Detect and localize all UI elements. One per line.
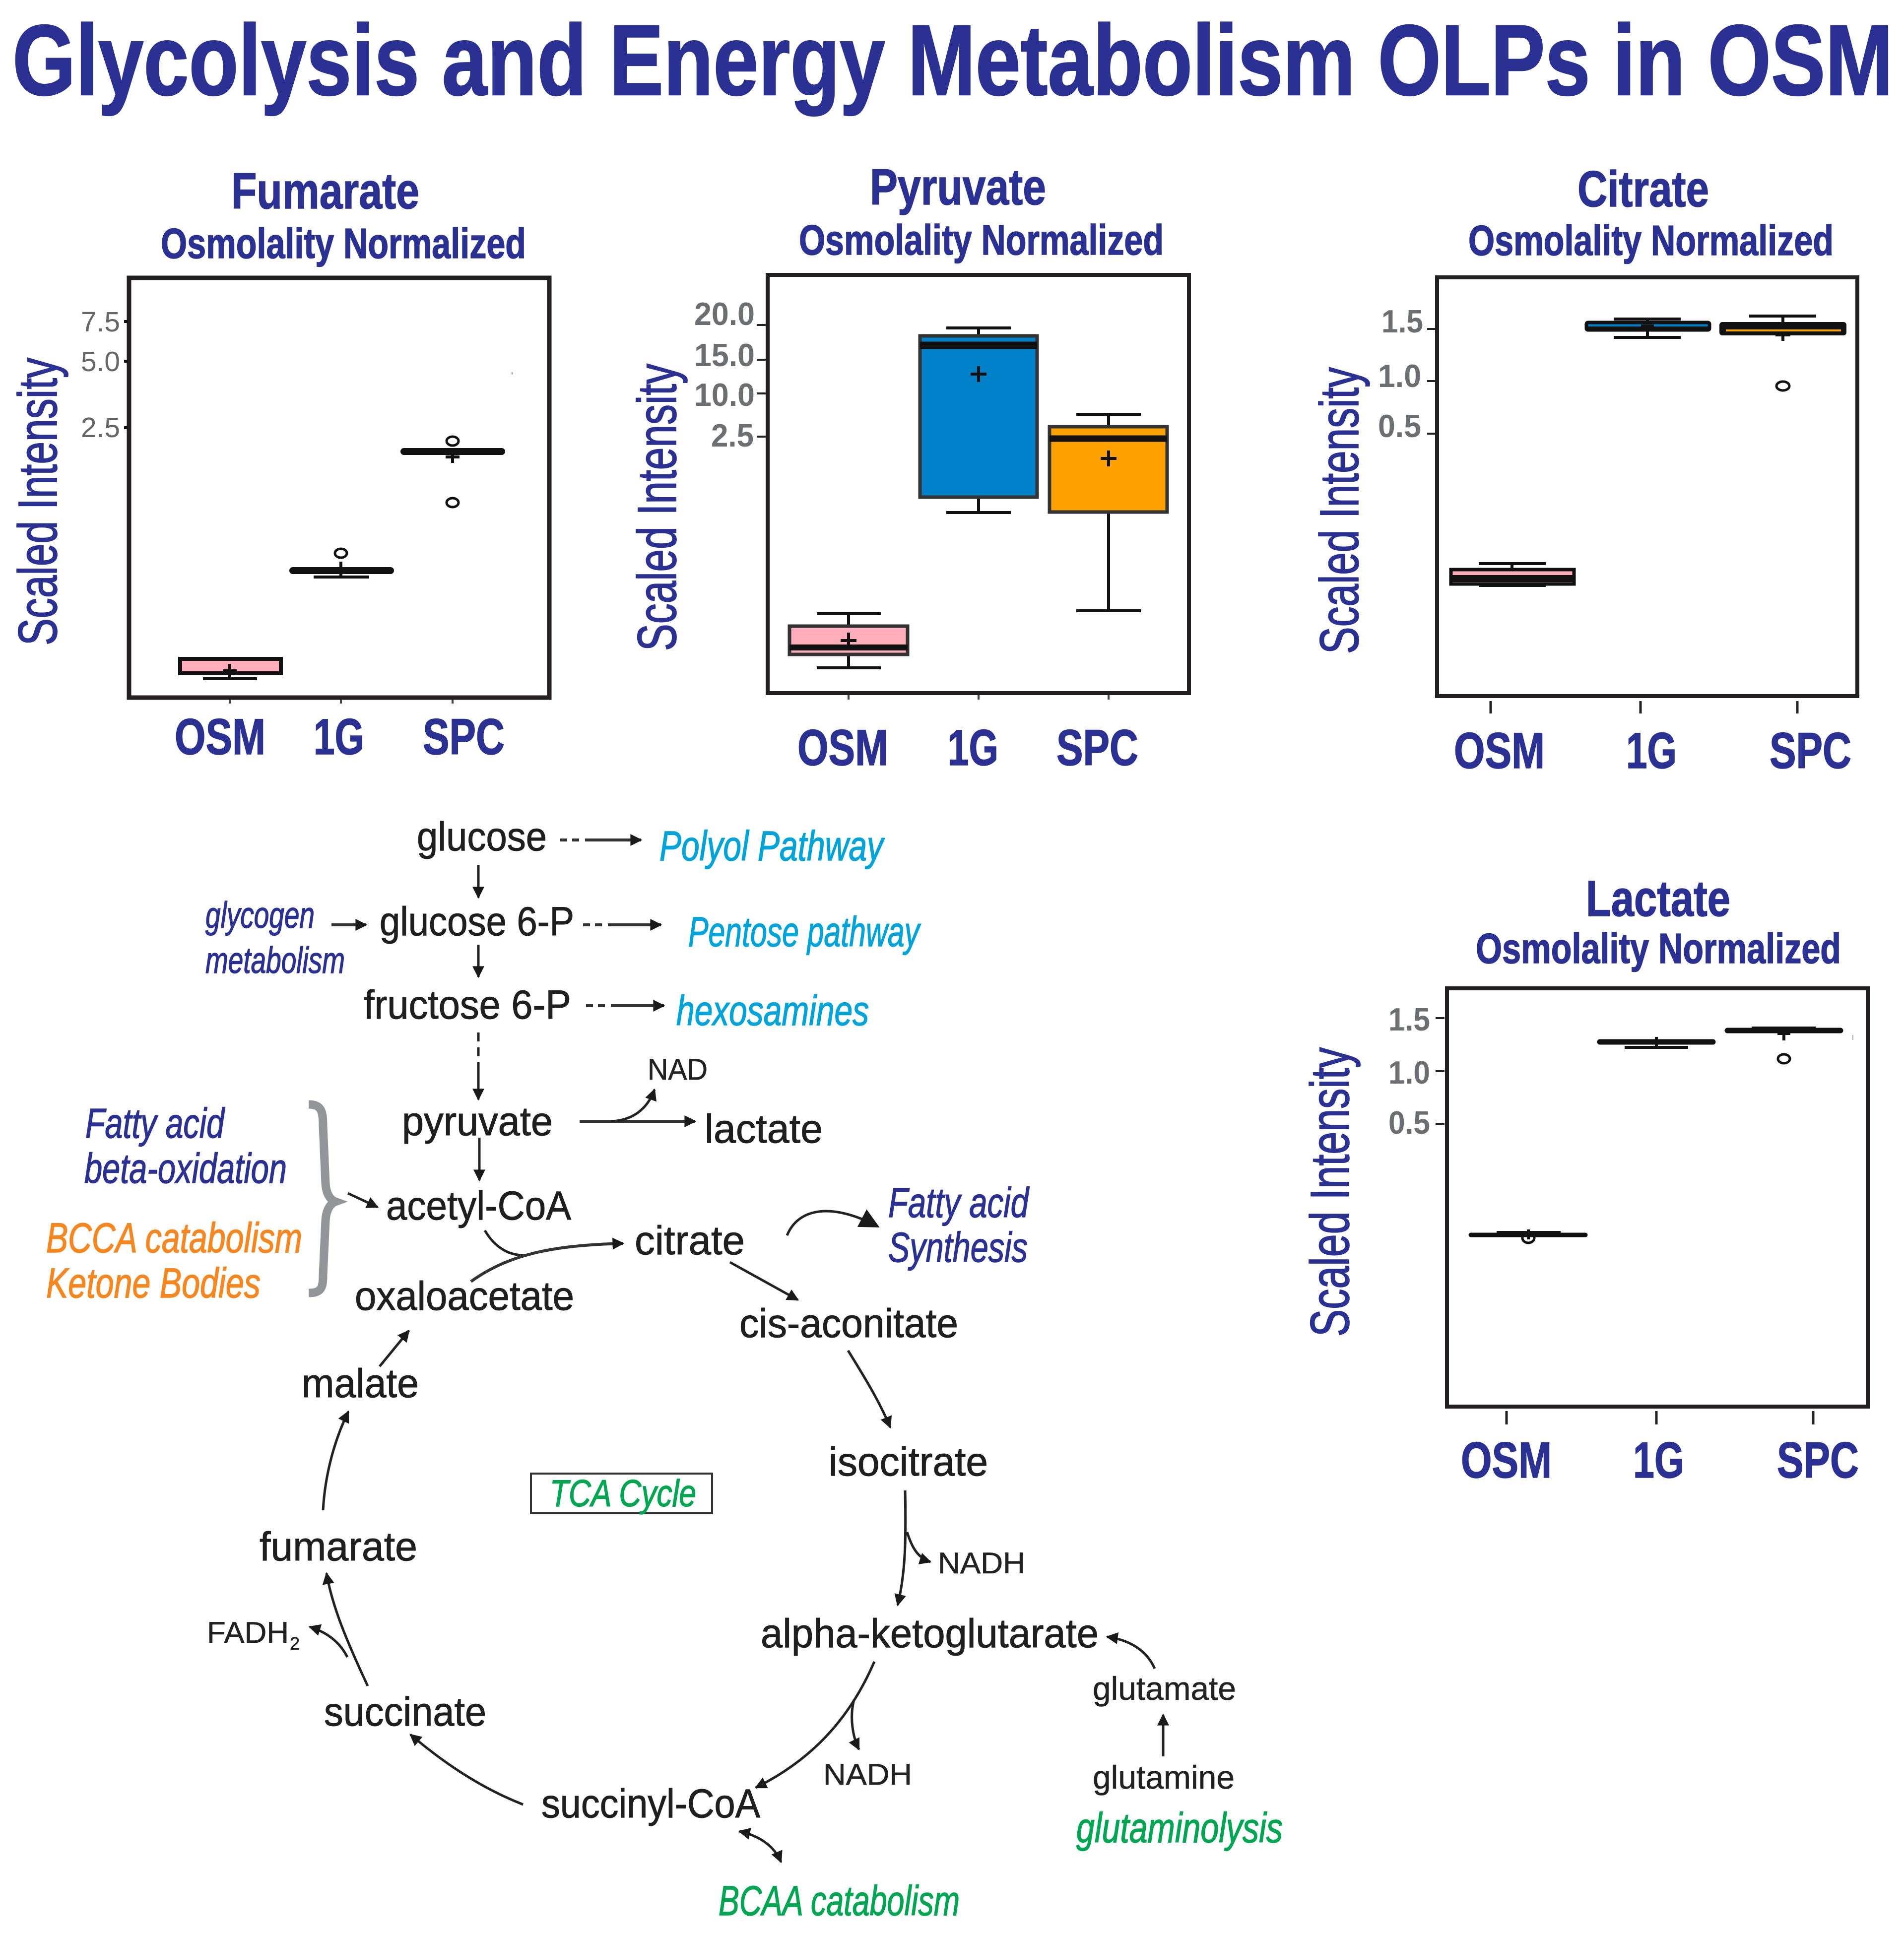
y tick labels: pyruvate: 15.0 — [694, 337, 755, 373]
y tick labels: lactate: 1.0 — [1388, 1054, 1430, 1091]
pathway annotation: fatty acid beta-oxidation: beta-oxidation — [84, 1145, 287, 1192]
box: fumarate OSM — [180, 659, 281, 679]
plot frame: citrate — [1437, 277, 1857, 696]
pathway annotation: fatty acid beta-oxidation — [84, 1100, 287, 1192]
panel: citrate box plot — [1309, 161, 1857, 779]
metabolite labels: NADH — [938, 1547, 1025, 1580]
y tick labels: citrate: 1.0 — [1378, 358, 1421, 394]
pathway annotation: glycogen metabolism: metabolism — [205, 940, 345, 981]
y tick labels: pyruvate — [694, 296, 767, 453]
subheading: fumarate normalization: Osmolality Normalized — [161, 220, 526, 267]
y tick labels: lactate: 1.5 — [1388, 1001, 1430, 1037]
pathway annotation: glycogen metabolism — [205, 895, 345, 981]
metabolite labels: succinate — [324, 1689, 486, 1735]
pathway arrows — [310, 840, 1163, 1862]
x axis labels: lactate: 1G — [1633, 1432, 1684, 1488]
box: lactate SPC — [1727, 1028, 1840, 1063]
heading: Pyruvate: Pyruvate — [870, 159, 1046, 215]
panel: pyruvate box plot — [627, 159, 1189, 776]
y tick labels: fumarate: 7.5 — [81, 306, 120, 338]
metabolite labels: glucose 6-P — [380, 899, 574, 944]
pathway annotation: Pentose pathway: Pentose pathway — [688, 908, 921, 955]
y tick labels: citrate: 1.5 — [1381, 303, 1423, 339]
metabolite labels: NAD — [648, 1053, 708, 1086]
y axis label: citrate: Scaled Intensity — [1309, 367, 1370, 654]
metabolite labels: oxaloacetate — [355, 1274, 574, 1319]
x axis labels: pyruvate: 1G — [948, 719, 998, 776]
metabolite labels: citrate — [635, 1218, 745, 1263]
y tick labels: pyruvate: 10.0 — [694, 377, 755, 413]
y tick labels: lactate: 0.5 — [1388, 1104, 1430, 1141]
x axis labels: citrate — [1454, 722, 1851, 779]
plot frame: lactate — [1447, 988, 1868, 1407]
panel: lactate box plot — [1300, 870, 1868, 1488]
y tick labels: pyruvate: 2.5 — [711, 417, 754, 453]
metabolite labels: succinyl-CoA — [541, 1781, 760, 1826]
pathway annotation: fatty acid synthesis — [888, 1179, 1030, 1271]
metabolite labels: alpha-ketoglutarate — [761, 1611, 1099, 1656]
box: citrate SPC — [1721, 316, 1845, 390]
pathway annotation: fatty acid beta-oxidation: Fatty acid — [85, 1100, 225, 1147]
x axis labels: lactate — [1461, 1432, 1859, 1488]
y axis label: pyruvate: Scaled Intensity — [627, 364, 688, 651]
y tick labels: fumarate: 2.5 — [81, 412, 120, 444]
metabolite labels: glutamate — [1093, 1670, 1236, 1707]
x axis labels: fumarate — [175, 709, 505, 765]
heading: Lactate: Lactate — [1586, 870, 1730, 927]
panel: metabolic pathway diagram — [46, 814, 1283, 1924]
pathway annotation: hexosamines: hexosamines — [676, 987, 869, 1034]
panel: fumarate box plot — [7, 163, 549, 765]
pathway annotation: fatty acid synthesis: Synthesis — [888, 1224, 1028, 1271]
metabolite labels: fructose 6-P — [364, 982, 571, 1028]
y axis label: fumarate: Scaled Intensity — [7, 358, 68, 645]
pathway annotation: Polyol Pathway: Polyol Pathway — [659, 823, 885, 869]
box: fumarate SPC — [404, 437, 502, 507]
metabolite labels: glutamine — [1093, 1759, 1235, 1796]
pathway annotation: BCCA catabolism and ketone bodies — [46, 1215, 302, 1306]
metabolite labels: cis-aconitate — [739, 1301, 958, 1346]
x axis labels: pyruvate — [797, 719, 1138, 776]
x axis labels: citrate: OSM — [1454, 722, 1545, 779]
heading: Citrate: Citrate — [1577, 161, 1709, 217]
y tick labels: fumarate — [81, 306, 128, 444]
x axis labels: lactate: SPC — [1777, 1432, 1859, 1488]
pathway annotation: BCCA catabolism and ketone bodies: BCCA catabolism — [46, 1215, 302, 1261]
heading: Fumarate: Fumarate — [231, 163, 419, 219]
box: citrate OSM — [1451, 564, 1574, 585]
metabolite labels: malate — [302, 1361, 419, 1406]
x axis labels: fumarate: SPC — [423, 709, 505, 765]
x axis labels: pyruvate: SPC — [1056, 719, 1138, 776]
box: lactate OSM — [1471, 1229, 1585, 1243]
x axis labels: pyruvate: OSM — [797, 719, 888, 776]
metabolite labels: FADH — [207, 1616, 289, 1649]
y tick labels: pyruvate: 20.0 — [694, 296, 755, 332]
metabolite labels: lactate — [705, 1106, 823, 1152]
pathway annotation: BCAA catabolism: BCAA catabolism — [719, 1877, 960, 1924]
box: pyruvate 1G — [920, 328, 1037, 513]
box: fumarate 1G — [293, 549, 391, 577]
metabolite labels: pyruvate — [402, 1099, 553, 1144]
box: citrate 1G — [1586, 319, 1709, 337]
box: lactate 1G — [1600, 1037, 1713, 1047]
metabolite labels: acetyl-CoA — [386, 1183, 571, 1228]
y tick labels: citrate — [1378, 303, 1435, 444]
metabolite labels: NADH — [823, 1758, 912, 1791]
y tick labels: citrate: 0.5 — [1378, 408, 1421, 444]
plot frame: pyruvate — [768, 275, 1189, 693]
x axis labels: fumarate: OSM — [175, 709, 265, 765]
plot frame: fumarate — [129, 278, 549, 698]
icon: grey brace — [309, 1104, 335, 1293]
pathway annotation: BCCA catabolism and ketone bodies: Ketone Bodies — [46, 1260, 261, 1306]
metabolite labels: fumarate — [260, 1524, 417, 1569]
y tick labels: fumarate: 5.0 — [81, 346, 120, 378]
callout: TCA Cycle: TCA Cycle — [550, 1473, 696, 1515]
x axis labels: citrate: SPC — [1770, 722, 1851, 779]
pathway annotation: fatty acid synthesis: Fatty acid — [888, 1179, 1030, 1226]
metabolite labels: isocitrate — [829, 1439, 988, 1484]
x axis labels: fumarate: 1G — [314, 709, 364, 765]
pathway annotation: glutaminolysis: glutaminolysis — [1076, 1805, 1283, 1851]
x axis labels: lactate: OSM — [1461, 1432, 1552, 1488]
y tick labels: lactate — [1388, 1001, 1444, 1141]
x axis labels: citrate: 1G — [1626, 722, 1677, 779]
metabolite labels: 2 — [290, 1633, 300, 1654]
pathway annotation: glycogen metabolism: glycogen — [205, 895, 315, 936]
y axis label: lactate: Scaled Intensity — [1300, 1047, 1361, 1337]
metabolite labels — [207, 814, 1236, 1826]
metabolite labels: glucose — [417, 814, 547, 859]
subheading: pyruvate normalization: Osmolality Normalized — [799, 217, 1164, 264]
box: pyruvate OSM — [789, 614, 908, 668]
box: pyruvate SPC — [1050, 414, 1167, 611]
